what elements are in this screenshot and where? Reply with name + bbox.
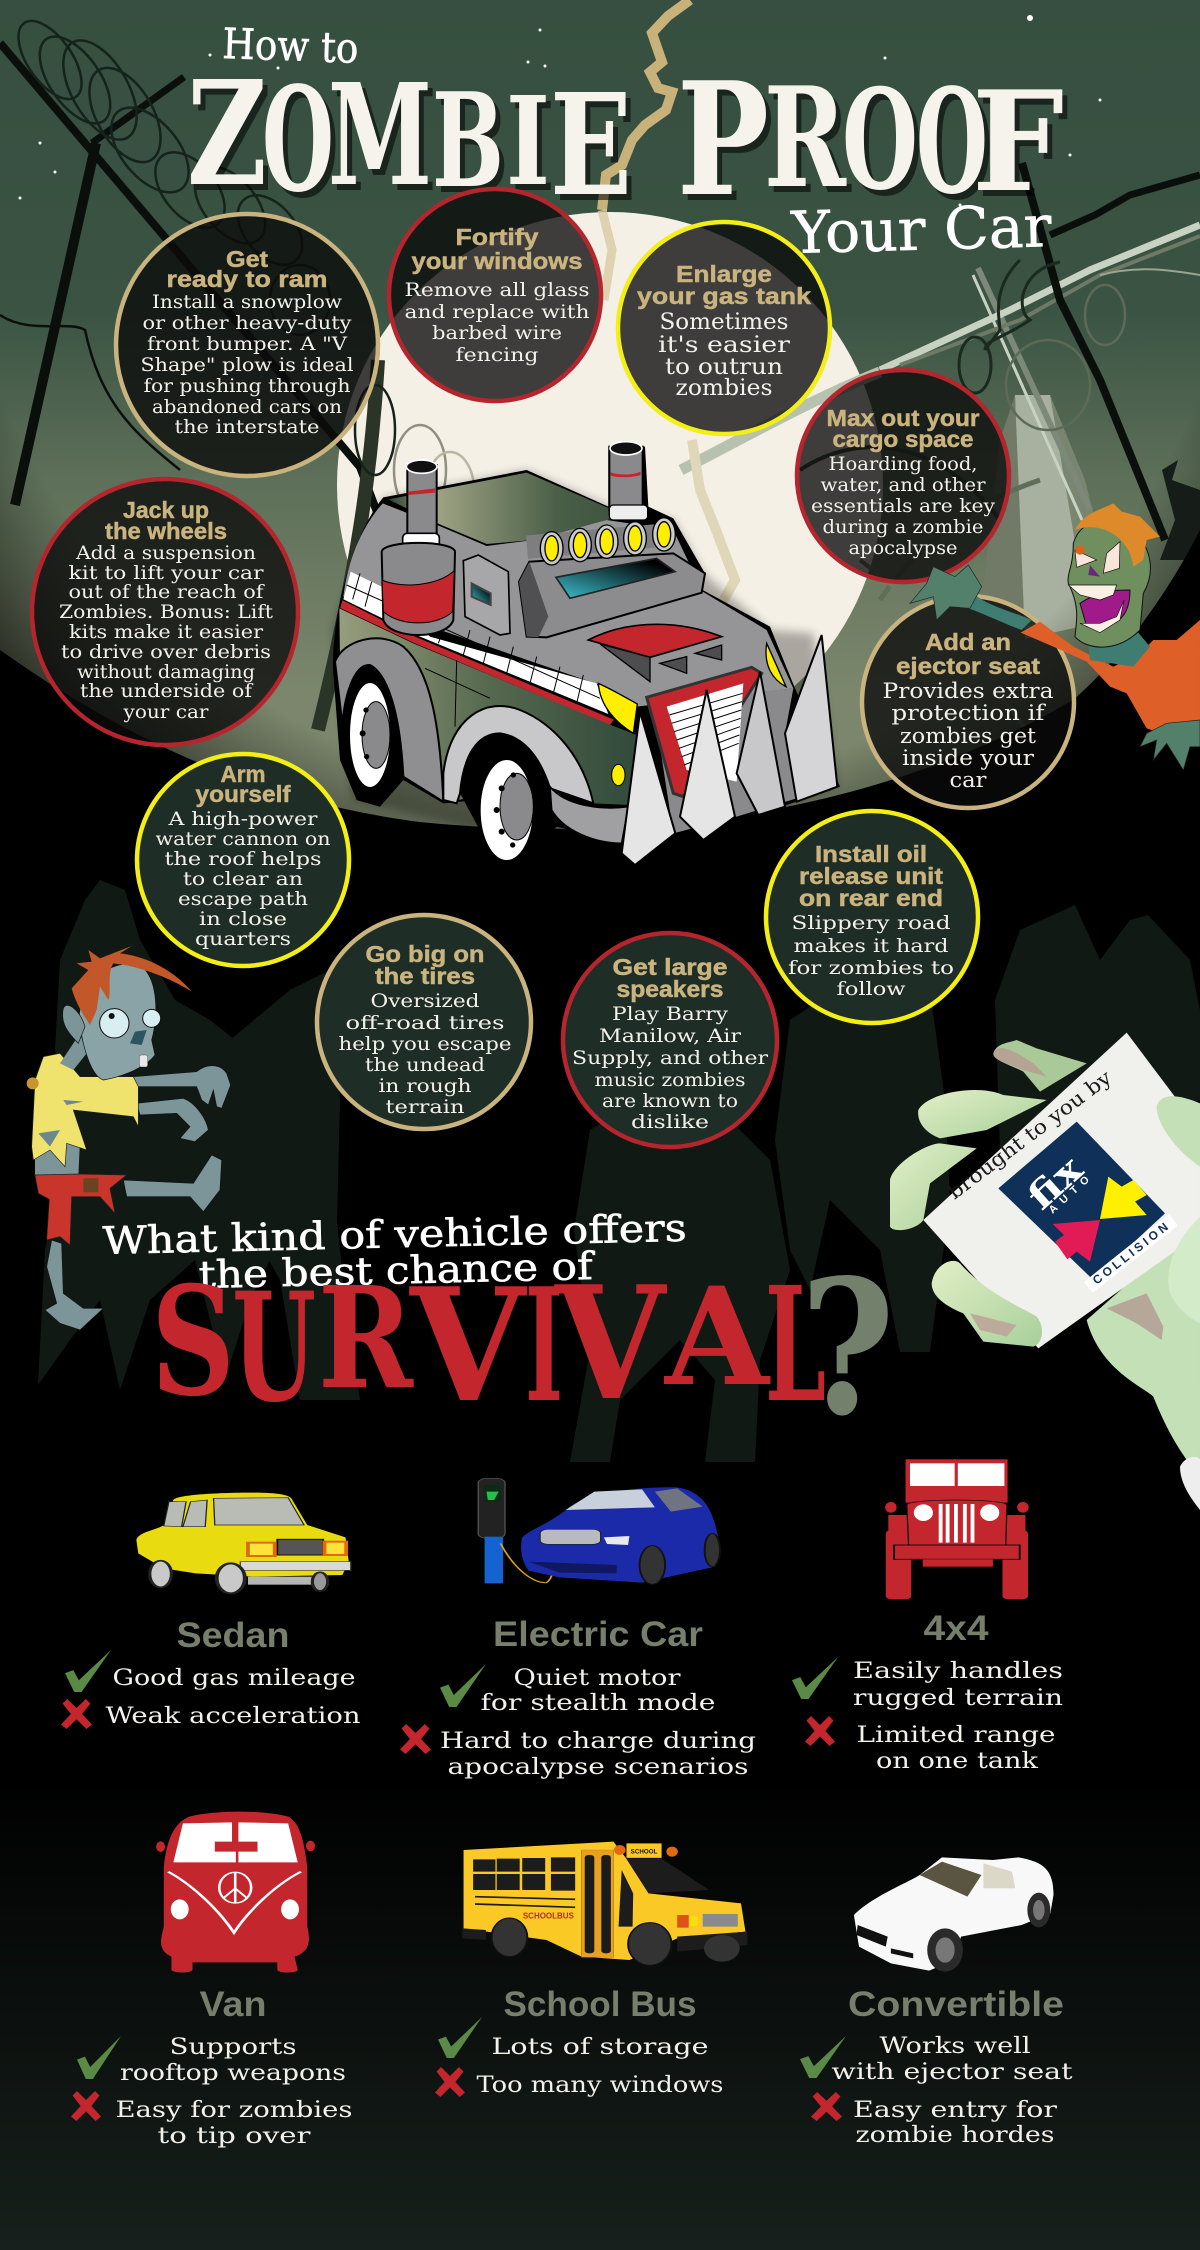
- upper arm: [133, 1066, 231, 1108]
- nail bottom: [970, 1313, 1017, 1337]
- pro check: [438, 2017, 482, 2058]
- panel: get ready to ram: or other heavy-duty: [142, 312, 352, 334]
- pro check: [792, 1657, 838, 1699]
- panel: go big on the tires: [317, 915, 531, 1129]
- background: pale fence structure: [681, 225, 1200, 660]
- left exhaust stack: [407, 465, 437, 538]
- panel: arm yourself: quarters: [195, 928, 291, 950]
- panel: get ready to ram: for pushing through: [144, 375, 350, 397]
- shoulder patch: [27, 1077, 39, 1089]
- panel: get ready to ram: Shape" plow is ideal: [140, 354, 354, 376]
- panel: go big on the tires: off-road tires: [346, 1012, 504, 1034]
- title: ZOMBIE PROOF: F: [972, 60, 1064, 223]
- background: crack over moon: [602, 210, 612, 300]
- right exhaust top: [610, 442, 642, 455]
- panel: enlarge your gas tank: it's easier: [658, 333, 791, 358]
- panel: arm yourself: escape path: [178, 888, 308, 910]
- name: Convertible: [848, 1985, 1064, 2024]
- pro text: Good gas mileage: [112, 1666, 356, 1691]
- background: crack: [602, 0, 690, 210]
- panel: fortify your windows: your windows: [412, 248, 582, 274]
- title: ZOMBIE PROOF: O: [262, 55, 334, 224]
- front wheel: [480, 759, 533, 861]
- fuel tank: [382, 543, 455, 635]
- grille frame: [647, 667, 762, 797]
- nose: [1088, 565, 1100, 577]
- vent window: [472, 583, 491, 605]
- panel: install oil release unit: for zombies to: [788, 957, 954, 979]
- logo diamond: [998, 1122, 1165, 1280]
- panel: enlarge your gas tank: [618, 222, 830, 434]
- title: ZOMBIE PROOF: B: [432, 64, 504, 217]
- con text: Easy entry for: [853, 2098, 1058, 2123]
- thumb: [1168, 1217, 1200, 1323]
- upper body: [343, 503, 793, 707]
- panel: go big on the tires: Go big on: [366, 941, 484, 967]
- finger right: [1157, 1096, 1200, 1167]
- hair: [1075, 503, 1160, 567]
- finger top: [993, 1040, 1087, 1092]
- panel: get large speakers: music zombies: [594, 1069, 746, 1091]
- pro text: Supports: [170, 2035, 296, 2060]
- head: [1068, 521, 1150, 647]
- shirt tear: [38, 1100, 83, 1147]
- icon: school bus: [462, 1842, 747, 1965]
- panel: max out cargo space: water, and other: [820, 474, 986, 496]
- panel: arm yourself: Arm: [220, 761, 266, 787]
- panel: get large speakers: Play Barry: [612, 1003, 728, 1025]
- roof scoop dark side: [519, 562, 548, 637]
- illustration: armored zombie-proof car: [333, 442, 840, 867]
- icon: yellow sedan: [136, 1493, 351, 1593]
- panel: get large speakers: [563, 933, 777, 1147]
- heading: what kind of vehicle offers: What kind of vehicle offers: [102, 1206, 687, 1263]
- roof light bar: [526, 518, 675, 565]
- vent box: [463, 555, 510, 635]
- panel: max out cargo space: apocalypse: [848, 537, 958, 559]
- name: School Bus: [504, 1985, 696, 2024]
- panel: get ready to ram: the interstate: [174, 416, 320, 438]
- heading: SURVIVAL: U: [232, 1260, 316, 1436]
- roof scoop window: [556, 558, 675, 598]
- hood scoop dark: [600, 644, 650, 682]
- pants patch: [83, 1178, 98, 1192]
- con cross: [435, 2067, 465, 2097]
- stripe grid lines: [347, 573, 600, 703]
- shirt: [32, 1053, 138, 1167]
- panel: get ready to ram: ready to ram: [166, 266, 328, 292]
- upper teeth: [1068, 585, 1117, 600]
- panel: jack up the wheels: the wheels: [105, 518, 227, 544]
- background: night sky: [0, 0, 1200, 860]
- heading: SURVIVAL: L: [765, 1253, 826, 1438]
- roof scoop: [519, 553, 705, 637]
- bumper: [550, 787, 628, 843]
- icon: school bus: SCHOOL: [631, 1848, 658, 1855]
- standing leg: [45, 1240, 103, 1330]
- panel: install oil release unit: on rear end: [799, 885, 943, 911]
- title: ZOMBIE PROOF: R: [764, 56, 847, 219]
- panel: install oil release unit: follow: [836, 978, 906, 1000]
- finger middle: [890, 1143, 977, 1230]
- title: How to: How to: [222, 19, 359, 73]
- finger bottom: [932, 1261, 1042, 1347]
- panel: fortify your windows: Remove all glass: [404, 279, 590, 301]
- con text: Too many windows: [476, 2073, 724, 2098]
- panel: add an ejector seat: Provides extra: [882, 679, 1054, 703]
- panel: max out cargo space: [797, 370, 1009, 582]
- panel: get ready to ram: abandoned cars on: [152, 396, 342, 418]
- finger upper: [918, 1090, 1047, 1138]
- left headlamp: [598, 683, 637, 733]
- panel: fortify your windows: fencing: [456, 344, 538, 366]
- panel: jack up the wheels: Add a suspension: [75, 542, 256, 564]
- heading: SURVIVAL: A: [663, 1257, 771, 1416]
- right headlamp: [766, 643, 786, 687]
- pro check: [800, 2036, 846, 2078]
- nail top: [993, 1048, 1047, 1077]
- pro text: Lots of storage: [492, 2035, 708, 2060]
- panel: get ready to ram: Install a snowplow: [152, 291, 343, 313]
- panel: install oil release unit: [766, 811, 978, 1023]
- icon: electric car and charger: [478, 1478, 720, 1584]
- panel: jack up the wheels: kit to lift your car: [68, 562, 265, 584]
- heading: question mark: ?: [800, 1238, 895, 1457]
- panel: 4x4: on one tank: [876, 1749, 1039, 1774]
- tooth: [139, 1055, 148, 1067]
- plow spikes: [622, 635, 837, 865]
- panel: jack up the wheels: Jack up: [123, 497, 209, 523]
- panel: add an ejector seat: [862, 596, 1074, 808]
- grille bars: [669, 693, 743, 765]
- name: Sedan: [176, 1616, 290, 1655]
- panel: fortify your windows: Fortify: [456, 224, 539, 250]
- card caption: brought to you by: [943, 1065, 1117, 1204]
- icon: red hippie van: [156, 1812, 315, 1972]
- sponsor: zombie hand holding card: [890, 1033, 1200, 1510]
- eyes: [1075, 542, 1120, 573]
- red pants: [35, 1174, 127, 1245]
- con cross: [71, 2091, 101, 2121]
- icon: school bus: SCHOOLBUS: [523, 1910, 574, 1920]
- con cross: [811, 2092, 842, 2121]
- grille: [667, 683, 743, 782]
- wheel bolts: [360, 707, 516, 848]
- background: black ground: [0, 530, 1200, 1800]
- panel: go big on the tires: the tires: [375, 963, 475, 989]
- lower front body: [653, 688, 797, 833]
- panel: convertible: [800, 1857, 1073, 2148]
- panel: arm yourself: A high-power: [167, 808, 319, 830]
- lower arm: [137, 1098, 208, 1142]
- panel: max out cargo space: essentials are key: [811, 495, 995, 517]
- car silhouette: [333, 447, 840, 867]
- lower teeth: [1080, 600, 1124, 633]
- panel: max out cargo space: cargo space: [832, 426, 974, 452]
- panel: install oil release unit: Slippery road: [792, 912, 950, 934]
- panel: jack up the wheels: your car: [122, 701, 209, 723]
- white grid stripe: [343, 572, 608, 714]
- heading: SURVIVAL: V: [554, 1252, 668, 1435]
- panel: sedan: [61, 1493, 360, 1729]
- neck: [60, 1033, 87, 1070]
- panel: van: [71, 1812, 352, 2149]
- front fender: [443, 706, 593, 803]
- heading: SURVIVAL: I: [525, 1254, 563, 1437]
- panel: convertible: zombie hordes: [856, 2123, 1054, 2148]
- panel: get large speakers: are known to: [602, 1090, 738, 1112]
- panel: school bus: [435, 1842, 747, 2098]
- panel: install oil release unit: Install oil: [815, 841, 927, 867]
- rear wheel: [349, 682, 391, 788]
- title: ZOMBIE PROOF: M: [328, 54, 432, 218]
- door lines: [425, 660, 490, 727]
- panel: add an ejector seat: car: [950, 768, 988, 792]
- panel: enlarge your gas tank: to outrun: [665, 355, 783, 380]
- panel: get large speakers: Manilow, Air: [599, 1025, 742, 1047]
- title: ZOMBIE PROOF: Z: [187, 49, 267, 218]
- mouth: [1080, 590, 1130, 627]
- green door panel: [339, 608, 637, 805]
- logo AUTO: AUTO: [1047, 1174, 1092, 1216]
- hand: [910, 565, 982, 620]
- panel: max out cargo space: during a zombie: [822, 516, 984, 538]
- con text: Easy for zombies: [116, 2098, 352, 2123]
- background: fence poles: [0, 43, 1200, 730]
- panel: fortify your windows: barbed wire: [432, 322, 562, 344]
- eye right: [143, 1009, 161, 1027]
- panel: enlarge your gas tank: Sometimes: [660, 310, 788, 335]
- title: Your Car: Your Car: [790, 192, 1053, 267]
- con text: Limited range: [856, 1723, 1056, 1748]
- small yellow lamp: [612, 764, 625, 786]
- hood vents: [660, 645, 722, 673]
- panel: max out cargo space: Hoarding food,: [828, 453, 978, 475]
- arm: [1087, 1220, 1200, 1477]
- hair: [72, 946, 192, 1025]
- rear wheel well: [343, 663, 403, 807]
- fuel tank red band: [382, 571, 454, 623]
- panel: electric car: for stealth mode: [480, 1691, 716, 1716]
- con text: Weak acceleration: [106, 1704, 360, 1729]
- eye left: [100, 1009, 129, 1038]
- neck: [1087, 627, 1150, 667]
- right exhaust collar: [609, 505, 648, 520]
- con text: Hard to charge during: [440, 1729, 756, 1754]
- panel: arm yourself: yourself: [196, 781, 291, 807]
- pro check: [440, 1664, 486, 1707]
- panel: get large speakers: dislike: [631, 1111, 709, 1133]
- background: zombie crowd silhouettes: [38, 880, 1200, 1462]
- panel: go big on the tires: help you escape: [338, 1033, 512, 1055]
- wrist cuff: [1180, 1457, 1200, 1510]
- title: ZOMBIE PROOF: [187, 48, 1064, 231]
- con cross: [805, 1716, 835, 1746]
- panel: enlarge your gas tank: your gas tank: [637, 283, 811, 309]
- panel: enlarge your gas tank: zombies: [676, 376, 772, 401]
- left exhaust band: [408, 488, 435, 495]
- heading: the best chance of: the best chance of: [198, 1244, 596, 1297]
- fuel tank collar: [403, 533, 439, 552]
- panel: add an ejector seat: protection if: [892, 701, 1047, 725]
- title: ZOMBIE PROOF: E: [550, 64, 632, 228]
- pro text: Works well: [880, 2034, 1030, 2059]
- background: stars: [18, 15, 1102, 206]
- panel: electric car: apocalypse scenarios: [448, 1755, 748, 1780]
- lower hand: [1140, 720, 1200, 770]
- name: Van: [200, 1985, 266, 2024]
- title: ZOMBIE PROOF: O: [916, 57, 988, 226]
- heading: SURVIVAL: R: [318, 1257, 414, 1421]
- panel: jack up the wheels: out of the reach of: [68, 581, 266, 603]
- character: shambling zombie: [27, 946, 231, 1330]
- head: [79, 963, 156, 1080]
- pro text: Quiet motor: [514, 1666, 681, 1691]
- arm: [968, 595, 1032, 630]
- panel: get large speakers: Get large: [612, 954, 728, 980]
- panel: add an ejector seat: Add an: [925, 629, 1011, 655]
- rear wheel hub: [362, 702, 390, 768]
- panel: electric car: [400, 1478, 756, 1780]
- panel: enlarge your gas tank: Enlarge: [676, 261, 772, 287]
- panel: get large speakers: speakers: [616, 976, 724, 1002]
- panel: fortify your windows: and replace with: [404, 301, 590, 323]
- panel: install oil release unit: makes it hard: [794, 935, 948, 957]
- panel: fortify your windows: [389, 189, 601, 401]
- background: crack lower: [692, 440, 735, 640]
- background: bottom gradient: [0, 1780, 1200, 2250]
- roof: [388, 473, 613, 544]
- panel: add an ejector seat: zombies get: [900, 724, 1037, 748]
- heading: SURVIVAL: [151, 1252, 826, 1438]
- torso: [35, 1140, 80, 1177]
- panel: van: to tip over: [158, 2124, 311, 2149]
- panel: go big on the tires: Oversized: [370, 990, 480, 1012]
- title: ZOMBIE PROOF: I: [506, 69, 550, 213]
- panel: convertible: with ejector seat: [832, 2060, 1073, 2085]
- panel: 4x4: rugged terrain: [853, 1686, 1063, 1711]
- panel: get ready to ram: Get: [226, 246, 268, 272]
- character: orange-shirt zombie: [910, 503, 1200, 770]
- logo COLLISION band: [1090, 1220, 1172, 1287]
- heading: SURVIVAL: S: [151, 1254, 235, 1430]
- title: ZOMBIE PROOF: O: [842, 58, 918, 221]
- panel: add an ejector seat: ejector seat: [896, 653, 1040, 679]
- pro check: [77, 2036, 121, 2079]
- logo yellow arrow: [1100, 1177, 1147, 1219]
- name: 4x4: [924, 1609, 989, 1648]
- panel: add an ejector seat: inside your: [902, 746, 1035, 770]
- panel: jack up the wheels: without damaging: [77, 661, 255, 683]
- logo COLLISION text: COLLISION: [1090, 1220, 1171, 1287]
- panel: van: rooftop weapons: [120, 2061, 346, 2086]
- right exhaust stack: [609, 447, 643, 510]
- con cross: [400, 1724, 431, 1754]
- panel: jack up the wheels: Zombies. Bonus: Lift: [59, 601, 273, 623]
- nose: [130, 1030, 147, 1045]
- red stripe: [339, 599, 615, 726]
- pro text: Easily handles: [853, 1659, 1063, 1684]
- heading: SURVIVAL: V: [409, 1254, 528, 1437]
- con cross: [61, 1699, 92, 1729]
- panel: get ready to ram: [116, 214, 378, 476]
- pupils: [109, 1013, 115, 1019]
- logo wordmark: fix: [1019, 1146, 1092, 1218]
- title: ZOMBIE PROOF: P: [677, 48, 769, 231]
- panel: arm yourself: water cannon on: [156, 828, 330, 850]
- logo pink arrow: [1053, 1220, 1100, 1262]
- ear: [63, 1005, 85, 1043]
- panel: go big on the tires: in rough: [378, 1075, 472, 1097]
- rear fender: [335, 638, 443, 802]
- card: [923, 1033, 1200, 1348]
- shirt: [1021, 620, 1200, 747]
- pro check: [65, 1650, 111, 1692]
- icon: red jeep: [885, 1459, 1029, 1599]
- name: Electric Car: [493, 1615, 703, 1654]
- background: barbed wire: [6, 11, 1125, 780]
- front wheel well: [460, 733, 557, 865]
- panel: go big on the tires: the undead: [365, 1054, 485, 1076]
- panel: arm yourself: to clear an: [183, 868, 303, 890]
- hood scoop: [588, 624, 722, 657]
- panel: install oil release unit: release unit: [799, 863, 943, 889]
- panel: arm yourself: in close: [199, 908, 287, 930]
- panel: get ready to ram: front bumper. A "V: [147, 333, 347, 355]
- panel: max out cargo space: Max out your: [826, 405, 980, 431]
- leg forward: [123, 1155, 222, 1212]
- panel: arm yourself: the roof helps: [164, 848, 322, 870]
- wound: [1107, 1293, 1163, 1340]
- panel: jack up the wheels: [32, 479, 298, 745]
- panel: 4x4: [792, 1459, 1063, 1774]
- panel: jack up the wheels: to drive over debris: [61, 641, 271, 663]
- pupils: [1075, 545, 1085, 555]
- background: dark foliage: [1160, 460, 1200, 560]
- panel: arm yourself: [137, 754, 349, 966]
- panel: jack up the wheels: the underside of: [80, 680, 254, 702]
- panel: get large speakers: Supply, and other: [572, 1047, 769, 1069]
- left exhaust top: [406, 460, 437, 473]
- front wheel hub: [500, 773, 533, 840]
- icon: white convertible: [854, 1857, 1054, 1972]
- background: vignette: [0, 0, 1200, 860]
- panel: go big on the tires: terrain: [386, 1096, 464, 1118]
- panel: jack up the wheels: kits make it easier: [69, 621, 264, 643]
- car shadow: [333, 471, 837, 867]
- right exhaust band: [611, 472, 641, 477]
- background: moon: [337, 212, 883, 758]
